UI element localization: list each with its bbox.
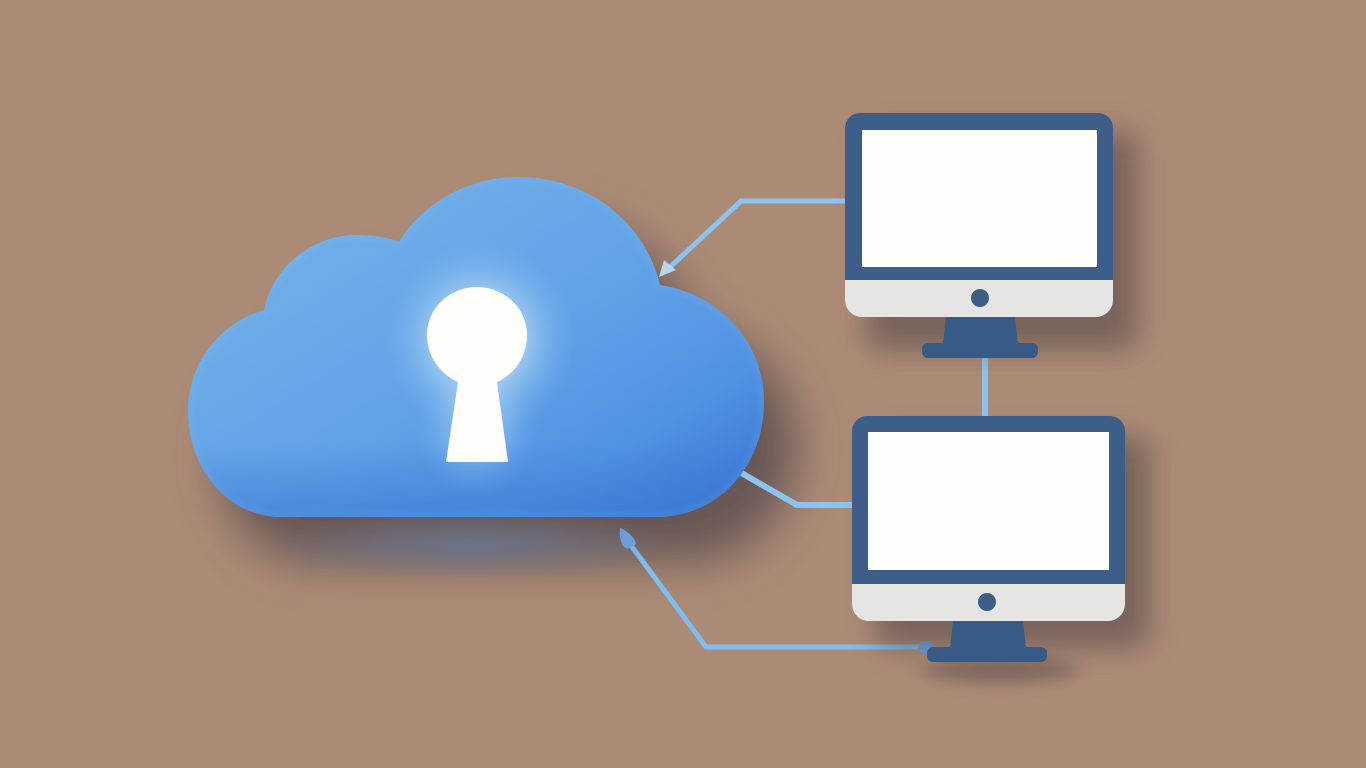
power button (971, 289, 989, 307)
icon: keyhole (427, 287, 527, 462)
connector: between monitors (982, 356, 988, 418)
cloud soft rim (562, 477, 738, 517)
stand (950, 620, 1026, 649)
cloud (188, 177, 764, 517)
cloud shadow (220, 221, 796, 561)
chin (845, 280, 1113, 317)
cloud blue underglow (270, 509, 670, 581)
screen (862, 130, 1097, 267)
bezel (845, 113, 1113, 280)
bezel (852, 416, 1125, 584)
monitor shadow top (866, 132, 1138, 350)
stand shadow bottom (922, 657, 1078, 683)
power button (978, 593, 996, 611)
chin (852, 584, 1125, 621)
connector: top monitor to cloud (659, 201, 846, 277)
connector: lower monitor stand to cloud with arrow (620, 528, 934, 654)
monitor: bottom (852, 416, 1125, 662)
monitor: top (845, 113, 1113, 358)
monitor shadow bottom (876, 436, 1150, 648)
infographic: cloud security connected to two computers (188, 113, 1163, 690)
screen (868, 432, 1109, 570)
stand (943, 317, 1018, 344)
connector: lower monitor to cloud (738, 471, 852, 505)
keyhole glow (385, 242, 575, 438)
